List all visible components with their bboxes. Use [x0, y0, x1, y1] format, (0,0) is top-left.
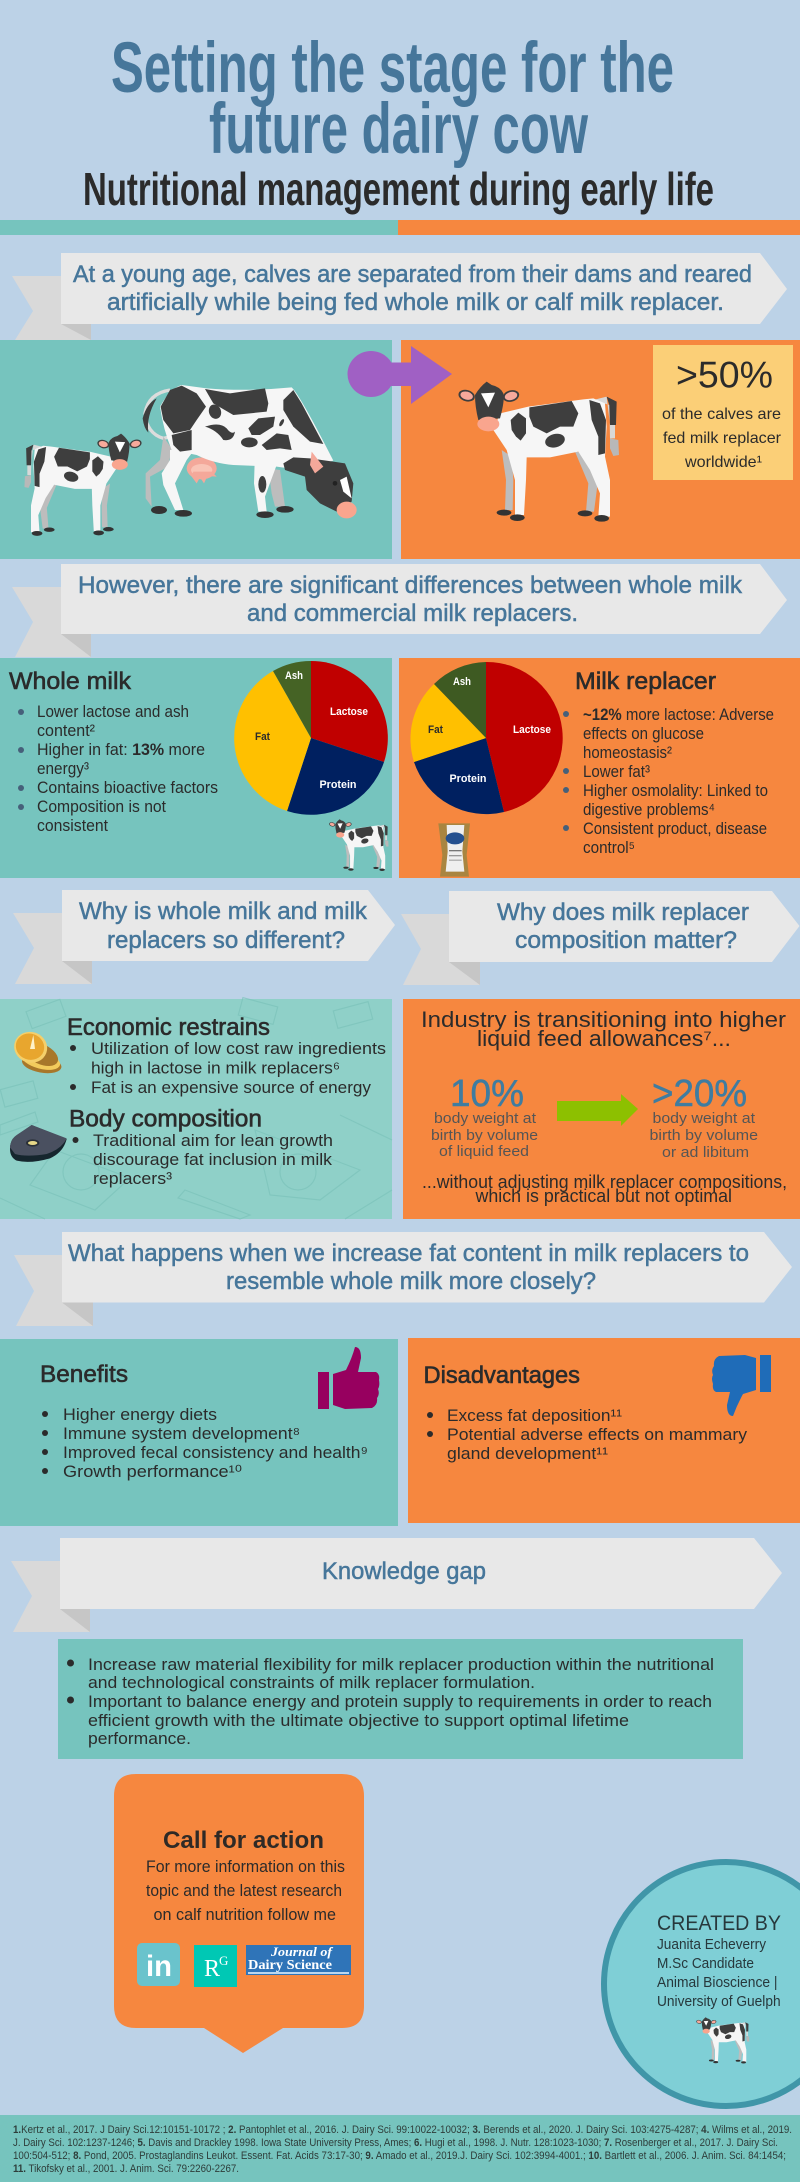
list: milk replacer: control⁵ — [583, 839, 635, 857]
callout: more than half: fed milk replacer — [663, 430, 782, 447]
logo: journal of dairy science: Dairy Science — [248, 1958, 332, 1973]
banner: why so different: replacers so different? — [107, 927, 345, 954]
panel: benefits — [0, 1339, 398, 1526]
panel: knowledge gap list: Important to balance energy and protein supply to requirements in order to reach — [88, 1693, 712, 1711]
stat: ten percent: of liquid feed — [439, 1143, 529, 1160]
badge: created by: CREATED BY — [657, 1911, 781, 1935]
icon: linkedin — [137, 1943, 180, 1986]
stat: ten percent: 10% — [450, 1073, 524, 1115]
banner: why composition matters — [401, 891, 800, 985]
stat: twenty percent: body weight at — [652, 1110, 756, 1127]
text: call for action — [146, 1858, 345, 1924]
banner: intro — [12, 253, 787, 340]
icon: researchgate: G — [219, 1953, 228, 1968]
list: whole milk: energy³ — [37, 760, 89, 778]
panel: whole milk — [0, 658, 392, 878]
stat: ten percent: body weight at — [434, 1110, 537, 1127]
icon: coins — [10, 1027, 63, 1076]
icon: researchgate: R — [204, 1956, 220, 1982]
chart: whole milk pie: Fat — [255, 731, 270, 743]
list: milk replacer: Consistent product, disease — [583, 820, 767, 838]
panel: knowledge gap list: and technological constraints of milk replacer formulation. — [88, 1674, 535, 1692]
stat: twenty percent — [650, 1073, 758, 1161]
panel: knowledge gap list: efficient growth with the ultimate objective to support optimal lifetime — [88, 1712, 629, 1730]
panel: liquid feed allowances — [403, 999, 800, 1219]
callout: call for action — [114, 1774, 364, 2053]
chart: milk replacer pie: Protein — [450, 773, 487, 785]
badge: created by: M.Sc Candidate — [657, 1955, 754, 1972]
text: call for action: For more information on this — [146, 1858, 345, 1876]
heading: benefits: Benefits — [40, 1361, 128, 1388]
chart: milk replacer pie: Lactose — [513, 724, 551, 736]
list: disadvantages: Potential adverse effects on mammary — [447, 1426, 748, 1444]
badge: created by: University of Guelph — [657, 1993, 781, 2010]
banner: differences: and commercial milk replacers. — [247, 600, 578, 627]
list: economic restrains: Fat is an expensive source of energy — [91, 1079, 372, 1097]
banner: why composition matters: Why does milk replacer — [497, 899, 749, 926]
banner: why composition matters: composition matter? — [515, 927, 737, 954]
list: benefits — [42, 1406, 368, 1481]
callout: more than half: of the calves are — [662, 406, 781, 423]
icon: thumb up — [318, 1347, 379, 1409]
heading: whole milk: Whole milk — [9, 668, 132, 695]
chart: whole milk pie: Lactose — [330, 706, 368, 718]
list: whole milk: Contains bioactive factors — [37, 779, 218, 797]
logo: journal of dairy science: Journal of — [270, 1944, 334, 1959]
list: economic restrains: Utilization of low cost raw ingredients — [91, 1040, 386, 1058]
stat: twenty percent: or ad libitum — [662, 1144, 749, 1161]
banner: knowledge gap: Knowledge gap — [322, 1558, 486, 1585]
list: economic restrains: high in lactose in milk replacers⁶ — [91, 1060, 340, 1078]
list: milk replacer: Higher osmolality: Linked to — [583, 782, 768, 800]
banner: what happens — [14, 1232, 792, 1326]
callout: more than half: worldwide¹ — [684, 454, 762, 471]
heading: body composition: Body composition — [69, 1106, 262, 1132]
list: benefits: Improved fecal consistency and health⁹ — [63, 1444, 368, 1462]
list: body composition — [72, 1132, 333, 1188]
references footer: 1.Kertz et al., 2017. J Dairy Sci.12:10151-10172 ; 2. Pantophlet et al., 2016. J. Dairy Sci. 99:10022-10032; 3. Berends et al., 2020. J. Dairy Sci. 103:4275-4287; 4. Wilms et al., 2019. — [13, 2124, 792, 2136]
heading: call for action: Call for action — [163, 1827, 324, 1854]
list: whole milk: Lower lactose and ash — [37, 703, 189, 721]
banner: differences: However, there are significant differences between whole milk — [78, 572, 743, 599]
list: disadvantages: Excess fat deposition¹¹ — [447, 1407, 623, 1425]
references footer — [0, 2115, 800, 2182]
icon: linkedin: in — [146, 1950, 172, 1983]
panel: knowledge gap list — [58, 1639, 743, 1759]
chart: milk replacer pie: Ash — [453, 676, 471, 688]
list: milk replacer: digestive problems⁴ — [583, 801, 715, 819]
icon: thumb down — [712, 1355, 771, 1416]
stat: ten percent — [431, 1073, 538, 1160]
list: economic restrains — [70, 1040, 386, 1097]
list: milk replacer: ~12% more lactose: Adverse — [583, 706, 774, 724]
text: industry transition — [421, 1007, 786, 1051]
banner: what happens: What happens when we increase fat content in milk replacers to — [68, 1240, 749, 1267]
panel: knowledge gap list: Increase raw material flexibility for milk replacer production within the nutritional — [88, 1656, 714, 1674]
list: benefits: Higher energy diets — [63, 1406, 217, 1424]
chart: whole milk pie — [234, 661, 388, 815]
list: whole milk: consistent — [37, 817, 108, 835]
panel: milk replacer — [399, 658, 800, 878]
icon: adult cow — [143, 385, 357, 518]
banner: what happens: resemble whole milk more closely? — [226, 1268, 596, 1295]
callout: more than half — [653, 345, 793, 480]
text: without adjusting — [422, 1172, 787, 1206]
references footer: 100:504-512; 8. Pond, 2005. Prostaglandins Leukot. Essent. Fat. Acids 73:17-30; 9. Amado et al., 2019.J. Dairy Sci. 102:3994-4001.; 10. Bartlett et al., 2006. J. Anim. Sci. 84:1454; — [13, 2150, 786, 2162]
list: whole milk: content² — [37, 722, 95, 740]
callout: more than half: >50% — [676, 354, 773, 396]
heading: economic restrains: Economic restrains — [67, 1014, 270, 1041]
chart: milk replacer pie: Fat — [428, 724, 443, 736]
icon: researchgate — [194, 1945, 237, 1987]
text: industry transition: Industry is transitioning into higher — [421, 1007, 786, 1032]
list: milk replacer: effects on glucose — [583, 725, 704, 743]
panel: economic and body composition — [0, 998, 392, 1219]
list: benefits: Growth performance¹⁰ — [63, 1463, 242, 1481]
icon: scale — [10, 1125, 67, 1162]
list: milk replacer — [563, 706, 774, 857]
list: disadvantages: gland development¹¹ — [447, 1445, 609, 1463]
icon: badge calf — [696, 2017, 749, 2063]
stat: ten percent: birth by volume — [431, 1127, 538, 1144]
badge: created by: Juanita Echeverry — [657, 1936, 766, 1953]
banner: differences — [12, 564, 787, 657]
panel: knowledge gap list: performance. — [88, 1730, 191, 1748]
title — [111, 29, 674, 169]
logo: journal of dairy science — [246, 1944, 351, 1975]
list: whole milk: Composition is not — [37, 798, 166, 816]
list: whole milk: Higher in fat: 13% more — [37, 741, 205, 759]
panel: separated calf — [401, 340, 800, 559]
banner: intro: artificially while being fed whole milk or calf milk replacer. — [107, 289, 724, 316]
list: milk replacer: Lower fat³ — [583, 763, 650, 781]
icon: calf — [457, 382, 619, 522]
stat: twenty percent: >20% — [652, 1073, 747, 1115]
text: call for action: topic and the latest research — [146, 1882, 342, 1900]
list: body composition: Traditional aim for lean growth — [93, 1132, 333, 1150]
panel: cow and calf — [0, 340, 392, 559]
list: body composition: discourage fat inclusion in milk — [93, 1151, 333, 1169]
heading: disadvantages: Disadvantages — [424, 1362, 580, 1389]
icon: small calf — [329, 819, 389, 871]
stat: twenty percent: birth by volume — [650, 1127, 758, 1144]
colour strip — [0, 220, 800, 235]
banner: knowledge gap — [11, 1538, 782, 1632]
references footer: 11. Tikofsky et al., 2001. J. Anim. Sci. 79:2260-2267. — [13, 2163, 239, 2175]
references footer: J. Dairy Sci. 102:1237-1246; 5. Davis and Drackley 1998. Iowa State University Press, Ames; 6. Hugi et al., 1998. J. Nutr. 128:1023-1030; 7. Rosenberger et al., 2017. J. Dairy Sci. — [13, 2137, 778, 2149]
heading: milk replacer: Milk replacer — [575, 668, 716, 695]
banner: why so different: Why is whole milk and milk — [79, 898, 368, 925]
banner: intro: At a young age, calves are separated from their dams and reared — [73, 261, 752, 288]
text: industry transition: liquid feed allowances⁷... — [477, 1026, 731, 1051]
text: without adjusting: ...without adjusting milk replacer compositions, — [422, 1172, 787, 1192]
title: future dairy cow — [209, 90, 589, 169]
arrow: purple — [348, 346, 452, 404]
badge: created by — [604, 1862, 800, 2106]
chart: whole milk pie: Ash — [285, 670, 303, 682]
list: disadvantages — [427, 1407, 748, 1463]
banner: why so different — [13, 890, 395, 984]
icon: calf beside cow — [24, 434, 143, 536]
list: milk replacer: homeostasis² — [583, 744, 672, 762]
text: call for action: on calf nutrition follow me — [154, 1906, 336, 1924]
text: without adjusting: which is practical but not optimal — [475, 1186, 732, 1206]
list: whole milk — [18, 703, 218, 835]
badge: created by: Animal Bioscience | — [657, 1974, 778, 1991]
icon: milk replacer bag — [438, 823, 470, 877]
chart: milk replacer pie — [410, 662, 563, 814]
arrow: green — [557, 1094, 638, 1126]
panel: disadvantages — [408, 1338, 800, 1523]
chart: whole milk pie: Protein — [320, 779, 357, 791]
list: body composition: replacers³ — [93, 1170, 173, 1188]
list: benefits: Immune system development⁸ — [63, 1425, 300, 1443]
